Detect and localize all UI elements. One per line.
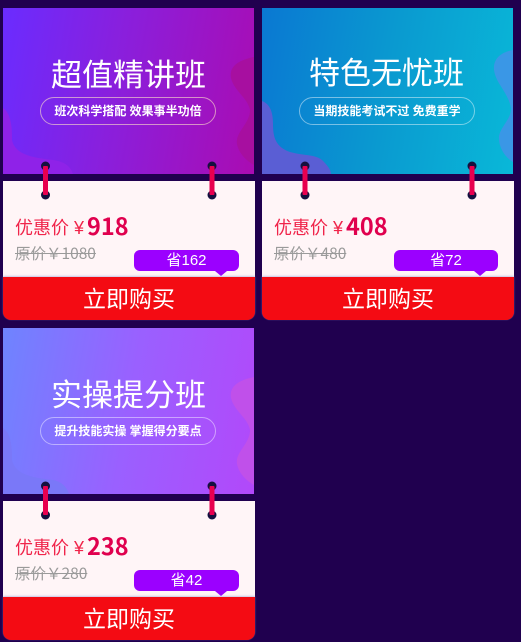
banner: 实操提分班 — [3, 328, 254, 494]
title: 实操提分班 — [51, 378, 206, 413]
hanging ropes — [41, 482, 216, 520]
card: 超值精讲班 — [2, 8, 256, 320]
subtitle pill — [40, 97, 216, 125]
buy button: 立即购买 — [83, 606, 175, 632]
decorative wave blobs — [3, 57, 254, 174]
price paper: 918 — [87, 208, 129, 242]
original price: 原价￥480 — [274, 242, 346, 264]
hanging ropes — [41, 162, 216, 200]
subtitle pill: 班次科学搭配 效果事半功倍 — [54, 104, 202, 118]
subtitle pill — [299, 97, 475, 125]
savings tag: 省72 — [430, 252, 462, 269]
card: 特色无忧班 — [261, 8, 515, 320]
subtitle pill: 当期技能考试不过 免费重学 — [313, 104, 461, 118]
current price: 优惠价 ¥ — [15, 538, 84, 558]
savings tag — [134, 570, 239, 596]
buy button: 立即购买 — [83, 286, 175, 312]
original price: 原价￥280 — [15, 562, 87, 584]
price paper: 238 — [87, 528, 129, 562]
original price: 原价￥1080 — [15, 242, 96, 264]
price paper: 408 — [346, 208, 388, 242]
price paper — [262, 181, 514, 277]
subtitle pill — [40, 417, 216, 445]
buy button — [262, 277, 514, 320]
card: 实操提分班 — [2, 328, 256, 640]
savings tag: 省42 — [171, 572, 202, 589]
banner: 超值精讲班 — [3, 8, 254, 174]
savings tag — [134, 250, 239, 276]
subtitle pill: 提升技能实操 掌握得分要点 — [54, 424, 202, 438]
price paper — [3, 181, 255, 277]
banner: 特色无忧班 — [262, 8, 513, 174]
savings tag — [394, 250, 498, 276]
title: 超值精讲班 — [51, 58, 206, 93]
price paper — [3, 501, 255, 597]
current price — [15, 528, 129, 562]
title: 特色无忧班 — [309, 56, 464, 91]
buy button — [3, 277, 255, 320]
decorative wave blobs — [38, 377, 254, 494]
current price — [274, 208, 388, 242]
buy button — [3, 597, 255, 640]
current price — [15, 208, 129, 242]
decorative wave blobs — [262, 50, 513, 174]
current price: 优惠价 ¥ — [274, 218, 343, 238]
current price: 优惠价 ¥ — [15, 218, 84, 238]
hanging ropes — [300, 162, 476, 200]
buy button: 立即购买 — [342, 286, 434, 312]
savings tag: 省162 — [166, 252, 207, 269]
